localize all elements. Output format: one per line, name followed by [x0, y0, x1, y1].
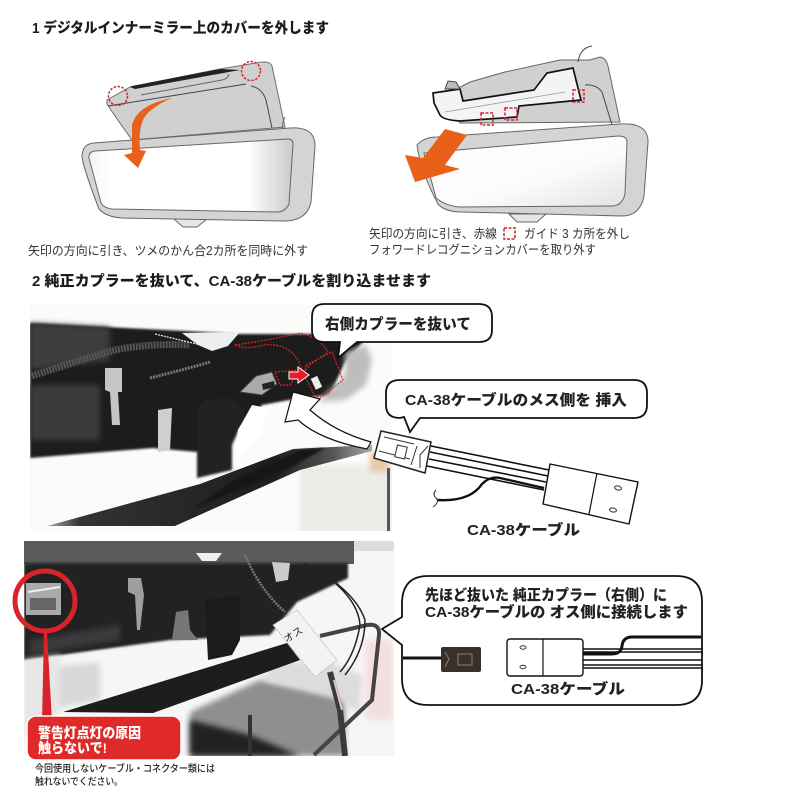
- red insertion arrow: [289, 367, 309, 383]
- mirror stem tab: [174, 219, 207, 227]
- connector housing: [374, 431, 431, 473]
- dark dash panel: [30, 323, 370, 458]
- label: CA-38 cable: CA-38ケーブル: [467, 521, 580, 539]
- callout: pull right coupler: [312, 304, 492, 358]
- white bracket: [128, 578, 144, 630]
- callout: connect male side: CA-38ケーブル: [511, 680, 625, 698]
- callout: connect male side: [382, 576, 702, 705]
- cover outlined: [433, 68, 581, 121]
- black wires: [305, 563, 365, 675]
- red pointer: [42, 632, 52, 722]
- caption: right illustration: フォワードレコグニションカバーを取り外す: [369, 243, 596, 257]
- white curved arrow: [285, 392, 371, 449]
- note text: [35, 762, 215, 788]
- white male connector: [273, 610, 337, 677]
- grey connector: [240, 372, 277, 395]
- frame tube: [314, 625, 379, 755]
- windshield bar: [47, 445, 372, 526]
- caption: right illustration: ガイド 3 カ所を外し: [524, 227, 630, 241]
- note text: 今回使用しないケーブル・コネクター類には: [35, 762, 215, 775]
- white bracket: [105, 368, 122, 425]
- warning light housing: [26, 583, 61, 615]
- warning group: 触らないで!: [38, 740, 107, 756]
- callout: insert female side: CA-38ケーブルのメス側を 挿入: [405, 391, 627, 409]
- red dashed legend square: [504, 228, 515, 239]
- caption: left illustration: 矢印の方向に引き、ツメのかん合2カ所を同時に外す: [28, 243, 308, 258]
- grey lower scene: [190, 680, 345, 756]
- plug box: [543, 464, 638, 524]
- red dashed outlines: [235, 333, 343, 397]
- red clip circles: [108, 86, 128, 106]
- heading: step 1: 1 デジタルインナーミラー上のカバーを外します: [32, 19, 329, 37]
- warning box: [27, 716, 181, 760]
- warning group: [15, 571, 181, 760]
- illustration: mirror with forward recognition cover: [405, 46, 648, 222]
- dark dash panel: [24, 563, 348, 660]
- windshield bar: [63, 643, 300, 713]
- callout: connect male side: 先ほど抜いた 純正カプラー（右側）に: [425, 586, 667, 604]
- mirror glass: [89, 139, 293, 212]
- cable wires: [583, 649, 702, 668]
- red guide squares: [481, 113, 493, 125]
- stem: [195, 424, 242, 480]
- callout: pull right coupler: 右側カプラーを抜いて: [325, 315, 471, 333]
- diagram: CA-38 female cable: [374, 431, 638, 524]
- orange curved arrow: [124, 98, 172, 168]
- white wedge: [24, 655, 60, 740]
- small connector: [272, 562, 290, 582]
- mirror glass: [424, 136, 627, 207]
- photo: under-mirror wiring, bottom: [24, 541, 394, 756]
- illustration: mirror with two clips: [82, 62, 315, 227]
- mirror stem tab: [509, 214, 546, 222]
- pole: [387, 468, 390, 531]
- orange straight arrow: [405, 129, 467, 182]
- grey housing at right: [318, 345, 372, 402]
- plug box: [507, 639, 583, 676]
- male connector: [441, 647, 481, 672]
- mirror frame: [82, 128, 315, 221]
- callout: connect male side: CA-38ケーブルの オス側に接続します: [425, 603, 688, 621]
- caption: right illustration: [369, 226, 630, 257]
- stem: [206, 634, 240, 660]
- mirror frame: [417, 124, 648, 216]
- wires: [427, 446, 549, 490]
- black wire: [403, 656, 442, 660]
- red circle: [15, 571, 75, 631]
- オス label: オス: [282, 624, 305, 645]
- mirror back housing: [107, 62, 285, 140]
- black branch wire: [437, 478, 544, 500]
- caption: right illustration: 矢印の方向に引き、赤線: [369, 226, 497, 241]
- heading: step 2: 2 純正カプラーを抜いて、CA-38ケーブルを割り込ませます: [32, 272, 431, 290]
- callout: insert female side: [386, 380, 647, 432]
- thick bent wire: [583, 637, 701, 654]
- braided harness: [32, 345, 190, 376]
- top grey strip: [24, 541, 354, 564]
- warning group: 警告灯点灯の原因: [38, 725, 141, 741]
- mirror back housing: [445, 57, 620, 123]
- photo: under-mirror wiring, top: [30, 305, 392, 535]
- note text: 触れないでください。: [35, 775, 123, 788]
